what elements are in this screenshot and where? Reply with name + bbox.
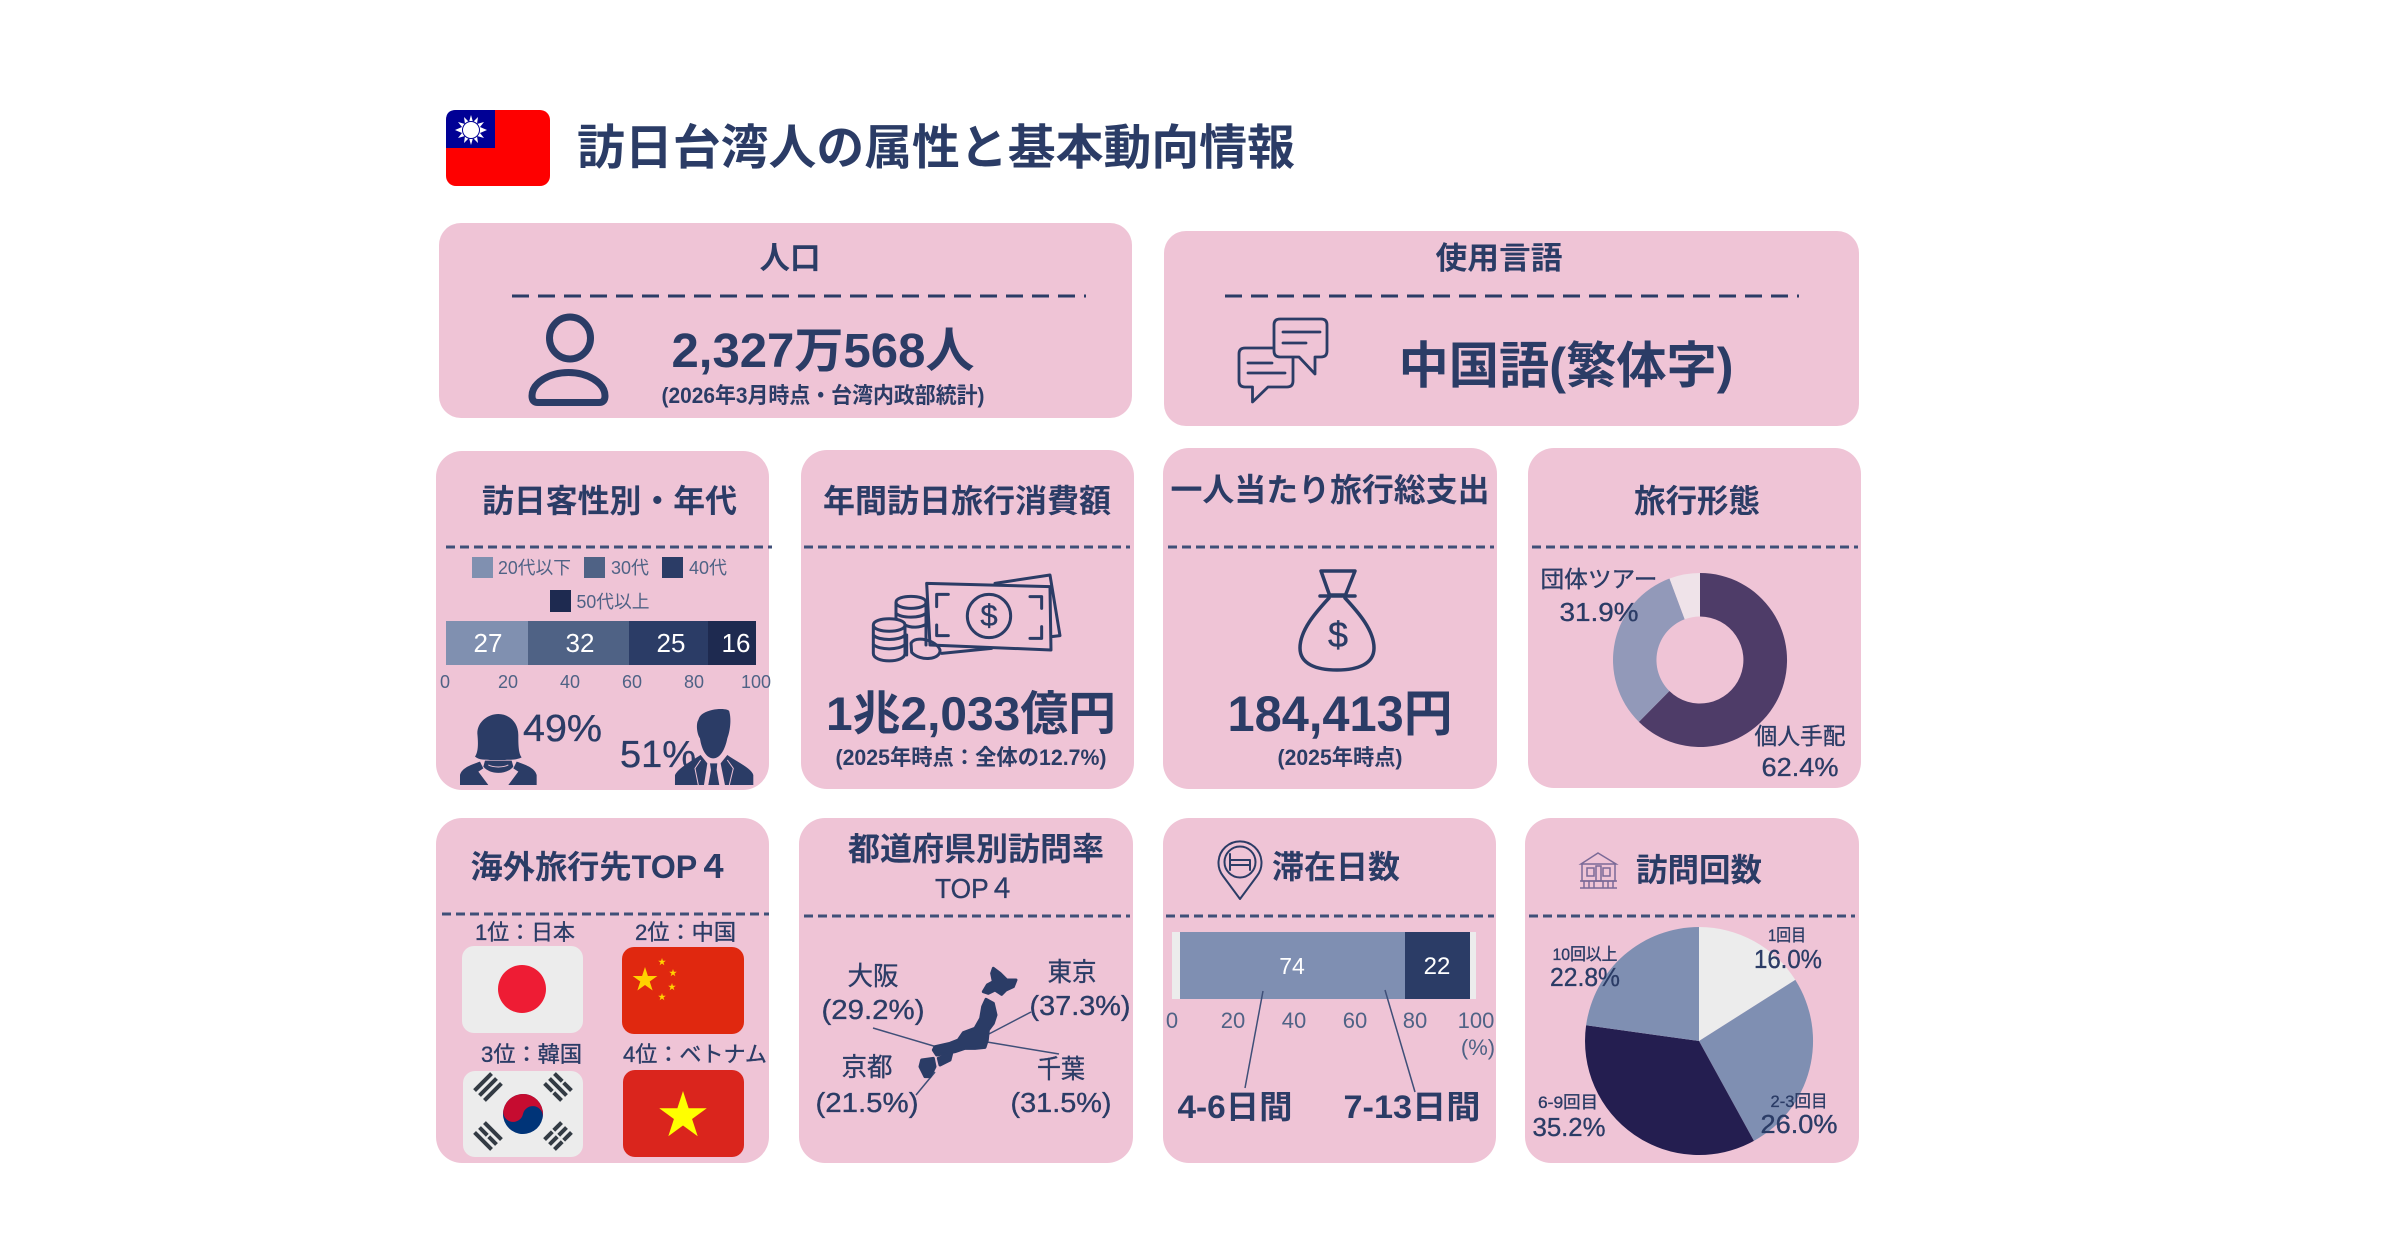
axis: (%) [1461, 1035, 1495, 1060]
label: 4-6 days: 4-6日間 [1178, 1089, 1292, 1125]
spending value: 1兆2,033億円 [826, 687, 1116, 740]
heading: visit count: 訪問回数 [1636, 852, 1762, 888]
label: 2-3 visits: 26.0% [1760, 1109, 1838, 1139]
panel: overseas destinations [436, 818, 769, 1163]
label: 6-9 visits [1532, 1093, 1606, 1142]
legend: 40代 [689, 558, 727, 578]
axis: 100 [741, 672, 771, 692]
panel: travel style [1528, 448, 1861, 788]
axis: 20 [1221, 1008, 1245, 1033]
label: Chiba: 千葉 [1037, 1054, 1085, 1084]
heading: annual spending: 年間訪日旅行消費額 [823, 483, 1111, 519]
label: Osaka: (29.2%) [822, 994, 924, 1025]
axis: 80 [1403, 1008, 1427, 1033]
heading: prefecture visit rate: TOP４ [935, 873, 1015, 904]
icon: money bag [1300, 571, 1374, 670]
leader lines [1245, 990, 1415, 1092]
axis: 0 [1166, 1008, 1178, 1033]
male share: 51% [620, 734, 696, 776]
stacked bar: stay: 22 [1424, 953, 1450, 980]
heading: gender and age: 訪日客性別・年代 [482, 483, 737, 519]
label: group tour: 団体ツアー [1540, 566, 1658, 592]
stacked bar: age [446, 621, 756, 665]
label: group tour: 31.9% [1560, 597, 1638, 627]
flag: China [622, 947, 744, 1034]
panel: language [1164, 231, 1859, 426]
axis: 0 [440, 672, 450, 692]
axis: 40 [560, 672, 580, 692]
axis: 40 [1282, 1008, 1306, 1033]
heading: prefecture visit rate: 都道府県別訪問率 [848, 831, 1104, 867]
axis [440, 672, 771, 692]
label: Chiba: (31.5%) [1010, 1087, 1112, 1118]
panel: visit count [1525, 818, 1859, 1163]
axis: 80 [684, 672, 704, 692]
label: Tokyo: 東京 [1048, 957, 1096, 987]
label: Kyoto: (21.5%) [816, 1087, 918, 1118]
pie chart [1585, 927, 1813, 1155]
rank labels: 3位：韓国 [481, 1042, 582, 1067]
label: Osaka [822, 961, 924, 1025]
legend: 30代 [611, 558, 649, 578]
per-person value: 184,413円 [1228, 686, 1452, 742]
legend: 50代以上 [576, 592, 650, 612]
label: independent: 個人手配 [1754, 723, 1846, 749]
flag: South Korea [463, 1071, 583, 1157]
axis: 20 [498, 672, 518, 692]
icon: building [1580, 853, 1617, 888]
label: 2-3 visits: 2-3回目 [1770, 1092, 1828, 1111]
heading: travel style: 旅行形態 [1634, 483, 1760, 519]
rank labels [475, 920, 767, 1067]
axis: 60 [622, 672, 642, 692]
icon: woman [460, 714, 537, 785]
icon: dollar sign: $ [980, 598, 998, 633]
label: Tokyo: (37.3%) [1030, 990, 1130, 1021]
stacked bar: age: 32 [566, 628, 594, 658]
axis: 100 [1458, 1008, 1494, 1033]
rank labels: 4位：ベトナム [623, 1042, 767, 1067]
legend [472, 557, 727, 612]
stacked bar: stay [1172, 932, 1476, 999]
population note: (2026年3月時点・台湾内政部統計) [662, 383, 984, 408]
label: Chiba [1010, 1054, 1112, 1118]
flag: Vietnam [623, 1070, 744, 1157]
heading: language: 使用言語 [1436, 241, 1562, 276]
title: 訪日台湾人の属性と基本動向情報 [577, 122, 1295, 175]
stacked bar: age: 25 [657, 628, 685, 658]
panel: population [439, 223, 1132, 418]
female share: 49% [523, 708, 602, 750]
stacked bar: age: 27 [474, 628, 502, 658]
heading: per-person spending: 一人当たり旅行総支出 [1170, 472, 1490, 508]
language value: 中国語(繁体字) [1398, 338, 1734, 394]
axis: 60 [1343, 1008, 1367, 1033]
icon: Taiwan flag [446, 110, 550, 186]
rank labels: 1位：日本 [475, 920, 575, 945]
stacked bar: age: 16 [722, 628, 750, 658]
label: Kyoto [816, 1052, 918, 1118]
heading: population: 人口 [760, 241, 820, 276]
axis [1166, 1008, 1495, 1060]
per-person note: (2025年時点) [1278, 745, 1402, 770]
label: 10+ visits: 22.8% [1550, 962, 1620, 992]
donut chart [1613, 573, 1787, 747]
icon: speech bubbles [1239, 319, 1327, 402]
leader lines [873, 1012, 1059, 1095]
label: 6-9 visits: 35.2% [1532, 1112, 1606, 1142]
heading: prefecture visit rate [848, 831, 1104, 904]
label: 6-9 visits: 6-9回目 [1538, 1093, 1598, 1112]
label: first visit: 1回目 [1768, 926, 1806, 945]
label: independent [1754, 723, 1846, 782]
flag: Japan [462, 946, 583, 1033]
icon: hotel pin [1218, 841, 1261, 899]
label: Tokyo [1030, 957, 1130, 1021]
panel: annual spending [801, 450, 1134, 789]
panel: per-person spending [1163, 448, 1497, 789]
icon: person [532, 317, 605, 402]
legend: 20代以下 [498, 558, 571, 578]
stacked bar: stay: 74 [1279, 953, 1305, 979]
panel: length of stay [1163, 818, 1496, 1163]
label: Osaka: 大阪 [848, 961, 898, 991]
panel: prefecture visit rate [799, 818, 1133, 1163]
rank labels: 2位：中国 [635, 920, 736, 945]
label: independent: 62.4% [1762, 752, 1838, 782]
label: Kyoto: 京都 [842, 1052, 892, 1082]
label: 7-13 days: 7-13日間 [1344, 1089, 1480, 1125]
label: 10+ visits: 10回以上 [1552, 945, 1618, 964]
heading: overseas destinations: 海外旅行先TOP４ [470, 849, 730, 885]
label: first visit: 16.0% [1754, 944, 1822, 974]
label: 10+ visits [1550, 945, 1620, 992]
icon: man [675, 709, 753, 785]
icon: bag dollar sign: $ [1328, 614, 1348, 655]
label: first visit [1754, 926, 1822, 974]
population value: 2,327万568人 [672, 325, 974, 378]
panel: visitor gender and age [436, 451, 772, 790]
spending note: (2025年時点：全体の12.7%) [836, 745, 1106, 770]
label: group tour [1540, 566, 1658, 627]
icon: banknotes and coins [873, 575, 1060, 661]
label: 2-3 visits [1760, 1092, 1838, 1139]
heading: length of stay: 滞在日数 [1272, 849, 1400, 885]
map of Japan [920, 968, 1016, 1077]
